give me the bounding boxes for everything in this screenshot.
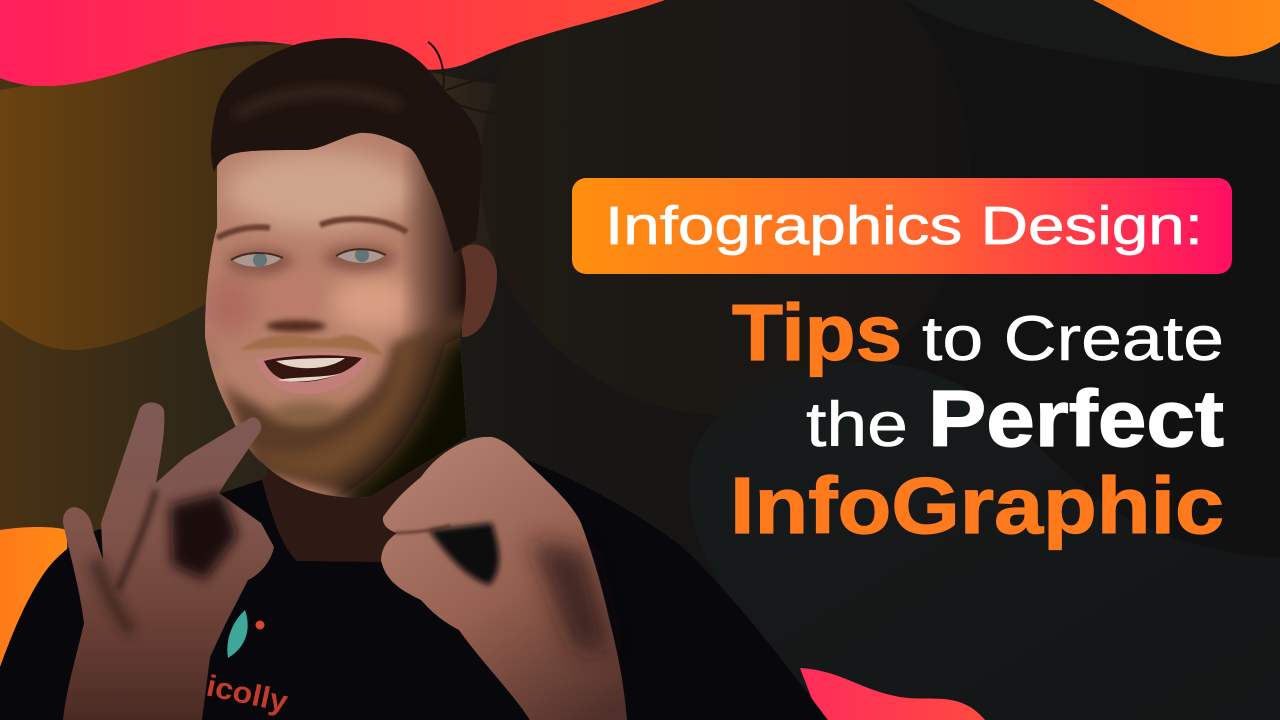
headline: InfoGraphic <box>730 461 1224 550</box>
bottom right wave, pink <box>800 668 985 720</box>
top wave, red-orange <box>0 0 665 86</box>
mouth <box>256 352 368 394</box>
headline: to Create <box>922 304 1224 374</box>
headline: Perfect <box>928 374 1224 463</box>
bottom left wave, orange <box>0 527 67 667</box>
eyes and eyebrows <box>217 219 407 267</box>
right hand <box>381 437 627 720</box>
t-shirt <box>0 458 828 720</box>
headline: the <box>806 390 908 460</box>
headline: Tips <box>732 288 902 377</box>
moustache <box>240 335 383 356</box>
hair <box>211 38 495 253</box>
title pill: Infographics Design: <box>605 196 1203 256</box>
shirt logo: icolly <box>204 670 291 719</box>
ear <box>462 245 497 337</box>
beard <box>205 310 470 500</box>
left hand <box>63 402 274 720</box>
headline <box>730 288 1224 550</box>
neck <box>262 440 470 562</box>
shirt logo <box>204 610 291 719</box>
title pill <box>572 178 1232 274</box>
face <box>205 132 467 498</box>
top right wave, orange <box>1093 0 1280 57</box>
presenter <box>0 38 828 720</box>
